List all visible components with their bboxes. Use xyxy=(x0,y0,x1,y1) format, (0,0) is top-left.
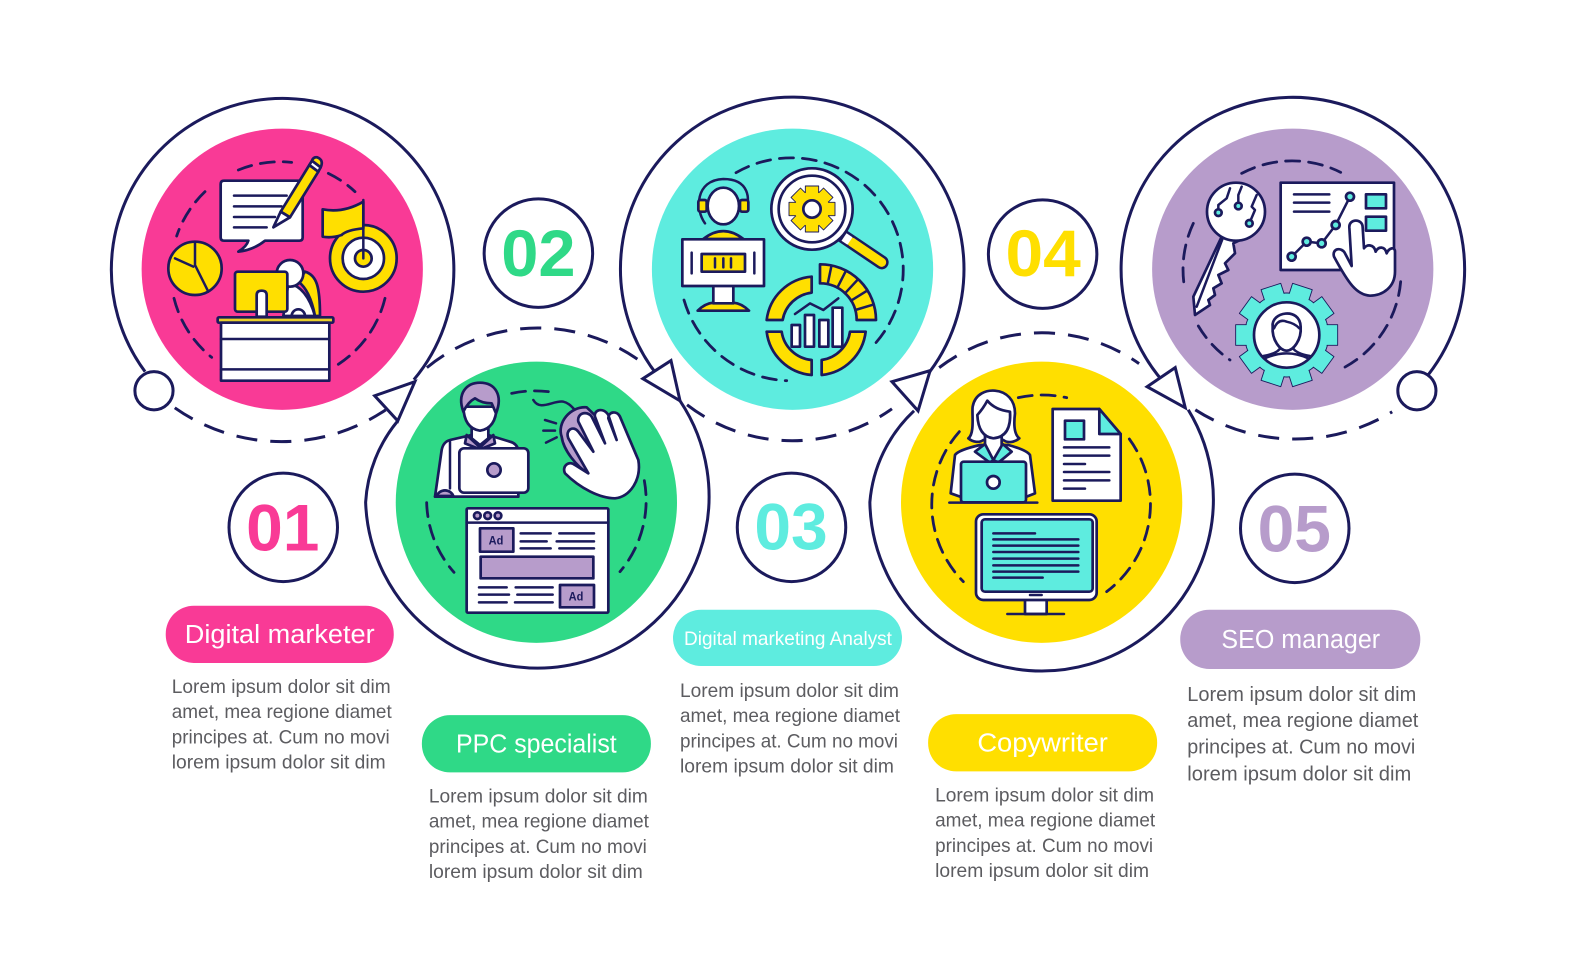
label pill: copywriter: Copywriter xyxy=(977,727,1108,757)
number badge 05: 05 xyxy=(1258,492,1331,566)
body text 4: principes at. Cum no movi xyxy=(935,835,1153,857)
panel: step 3 digital marketing analyst xyxy=(620,97,964,777)
outer ring 4 xyxy=(870,410,1213,671)
label pill: PPC specialist: PPC specialist xyxy=(456,728,617,758)
number badge 04 xyxy=(988,200,1097,308)
label pill: digital marketer: Digital marketer xyxy=(185,619,375,649)
icon: speech bubble with pencil xyxy=(221,157,322,252)
body text 3: amet, mea regione diamet xyxy=(680,705,901,727)
number badge 03 xyxy=(737,473,846,582)
icon: key with circuit xyxy=(1193,183,1265,315)
body text 1: amet, mea regione diamet xyxy=(172,701,392,723)
icon: man with laptop xyxy=(435,383,528,497)
body text 5: amet, mea regione diamet xyxy=(1187,710,1419,732)
icon: pie chart xyxy=(168,242,222,295)
body text 3: Lorem ipsum dolor sit dim xyxy=(680,680,899,702)
label pill: SEO manager xyxy=(1180,610,1420,669)
body text 4: lorem ipsum dolor sit dim xyxy=(935,860,1149,882)
panel: step 1 digital marketer xyxy=(111,98,454,773)
icon: mouse and hand xyxy=(533,400,639,498)
icon: donut and bar chart xyxy=(767,264,876,375)
label pill: SEO manager: SEO manager xyxy=(1221,624,1380,654)
body text 3: principes at. Cum no movi xyxy=(680,730,898,752)
label pill: digital marketer xyxy=(166,606,394,663)
body text 4: amet, mea regione diamet xyxy=(935,810,1156,832)
icon group 3 xyxy=(682,158,903,381)
outer ring 1 xyxy=(111,98,454,380)
icon: document xyxy=(1053,409,1121,501)
purple circle xyxy=(1152,129,1433,410)
arrow: step 3 to 4 xyxy=(892,371,930,411)
outer ring 3 xyxy=(620,97,964,378)
icon: woman with laptop xyxy=(949,391,1037,503)
icon: desktop monitor xyxy=(976,514,1097,614)
icon: gear with user xyxy=(1236,283,1338,387)
dashed connector 1 xyxy=(175,408,386,442)
icon: person at desk with monitor xyxy=(218,260,333,381)
icon: browser window with ads xyxy=(467,508,608,613)
end bubble xyxy=(1398,372,1436,410)
number badge 02: 02 xyxy=(501,217,576,291)
body text 2: Lorem ipsum dolor sit dim xyxy=(429,786,648,808)
icon group 4 xyxy=(932,391,1150,614)
arrow: step 2 to 3 xyxy=(643,361,680,401)
number badge 01 xyxy=(229,473,337,582)
dashed connector 2 xyxy=(427,328,641,368)
label pill: digital marketing analyst xyxy=(673,610,902,666)
arrow: step 4 to 5 xyxy=(1147,368,1185,408)
panel: step 5 SEO manager xyxy=(1121,97,1465,785)
label pill: copywriter xyxy=(928,714,1157,771)
cyan circle xyxy=(652,129,933,410)
dashed connector 3 xyxy=(687,405,892,441)
panel: step 2 PPC specialist xyxy=(366,199,709,883)
inner dashed ring 4 xyxy=(932,395,1150,592)
body text 1: principes at. Cum no movi xyxy=(172,726,390,748)
label pill: PPC specialist xyxy=(422,715,651,772)
pink circle xyxy=(142,129,423,410)
dashed connector 4 xyxy=(939,333,1139,368)
body text 5: principes at. Cum no movi xyxy=(1187,736,1415,758)
body text 2: principes at. Cum no movi xyxy=(429,836,647,858)
outer ring 2 xyxy=(366,401,709,668)
body text 2: lorem ipsum dolor sit dim xyxy=(429,861,643,883)
inner dashed ring 5 xyxy=(1183,161,1401,370)
body text 2: amet, mea regione diamet xyxy=(429,811,649,833)
inner dashed ring 3 xyxy=(684,158,903,381)
body text 1: lorem ipsum dolor sit dim xyxy=(172,751,386,773)
body text 5: lorem ipsum dolor sit dim xyxy=(1187,763,1411,785)
number badge 01: 01 xyxy=(246,491,319,565)
green circle xyxy=(396,362,677,643)
panel: step 4 copywriter xyxy=(870,200,1213,882)
icon: flag and target xyxy=(323,200,397,292)
number badge 02 xyxy=(484,199,593,307)
label pill: digital marketing analyst: Digital marketing Analyst xyxy=(684,629,893,650)
arrow: step 1 to 2 xyxy=(375,382,415,421)
icon: browser window with ads: Ad xyxy=(569,590,583,604)
number badge 05 xyxy=(1241,474,1349,583)
start bubble xyxy=(135,372,173,410)
body text 1: Lorem ipsum dolor sit dim xyxy=(172,676,391,698)
number badge 03: 03 xyxy=(754,490,828,564)
outer ring 5 xyxy=(1121,97,1465,382)
body text 4: Lorem ipsum dolor sit dim xyxy=(935,785,1154,807)
icon: browser window with ads: Ad xyxy=(489,533,503,547)
icon group 1 xyxy=(168,157,397,381)
yellow circle xyxy=(901,362,1182,643)
icon group 5 xyxy=(1183,161,1401,387)
icon: magnifier with gear xyxy=(771,168,882,262)
inner dashed ring 1 xyxy=(174,162,385,364)
dashed connector 5 xyxy=(1195,410,1392,439)
body text 3: lorem ipsum dolor sit dim xyxy=(680,755,894,777)
icon group 2 xyxy=(427,383,646,613)
body text 5: Lorem ipsum dolor sit dim xyxy=(1187,684,1416,706)
inner dashed ring 2 xyxy=(427,391,646,572)
icon: chart board with pointing hand xyxy=(1281,183,1395,296)
number badge 04: 04 xyxy=(1005,217,1081,291)
icon: support agent at monitor xyxy=(682,179,764,311)
